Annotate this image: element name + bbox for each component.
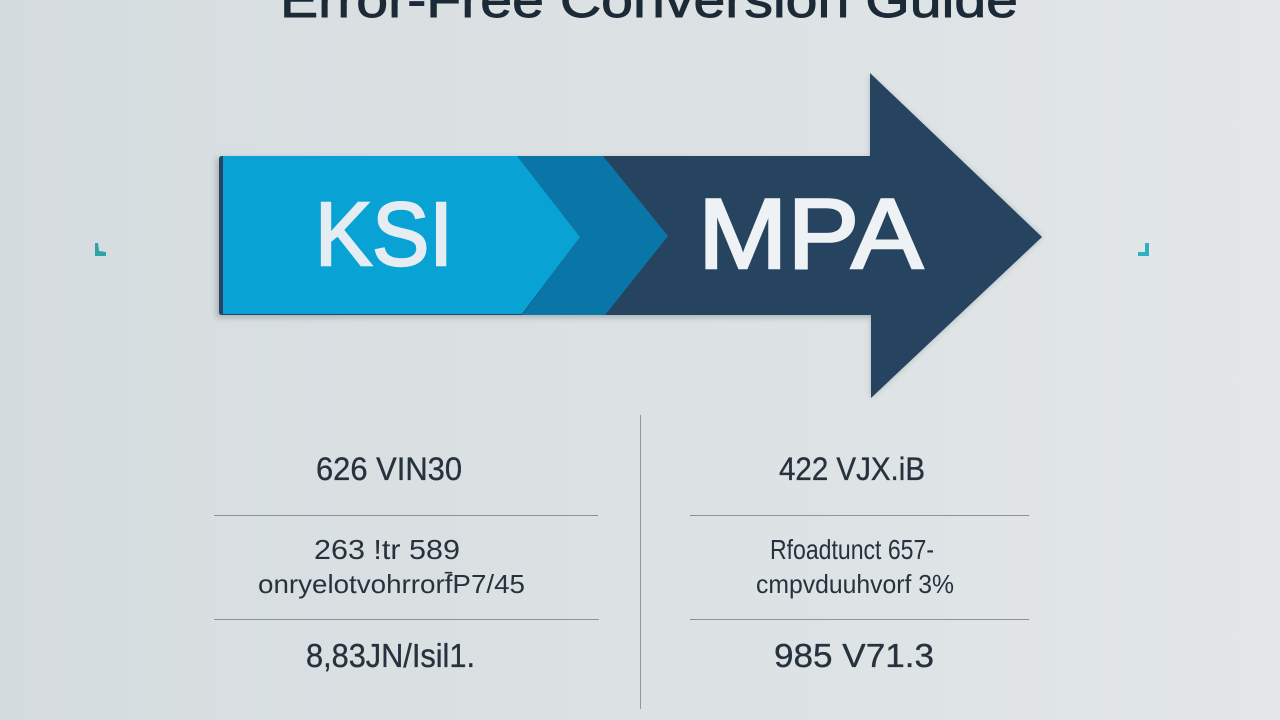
center divider (640, 415, 641, 709)
value row 2 right: cmpvduuhvorf 3% (756, 569, 954, 599)
value row 1 left: 626 VIN30 (316, 451, 462, 487)
label: MPA: MPA (698, 178, 923, 289)
middle chevron (517, 156, 668, 315)
value row 2 right: Rfoadtunct 657- (770, 534, 934, 565)
value row 2 right (756, 534, 954, 599)
value row 3 right: 985 V71.3 (774, 637, 934, 674)
icon: left corner marker (95, 243, 106, 256)
value row 3 left: 8,83JN/Isil1. (306, 637, 475, 674)
icon: right corner marker (1138, 243, 1149, 256)
panel: right values (690, 451, 1029, 674)
value row 1 right: 422 VJX.iB (779, 451, 925, 487)
conversion arrow (216, 73, 1042, 398)
panel: left values (214, 451, 599, 674)
value row 2 left: onryelotvohrrorf̄P7/45 (258, 569, 525, 599)
dark arrow: MPa segment (219, 73, 1042, 398)
light chevron: ksi segment (223, 156, 580, 314)
label: KSI: KSI (315, 185, 453, 285)
value row 2 left: 263 !tr 589 (314, 534, 460, 565)
value row 2 left (258, 534, 525, 599)
